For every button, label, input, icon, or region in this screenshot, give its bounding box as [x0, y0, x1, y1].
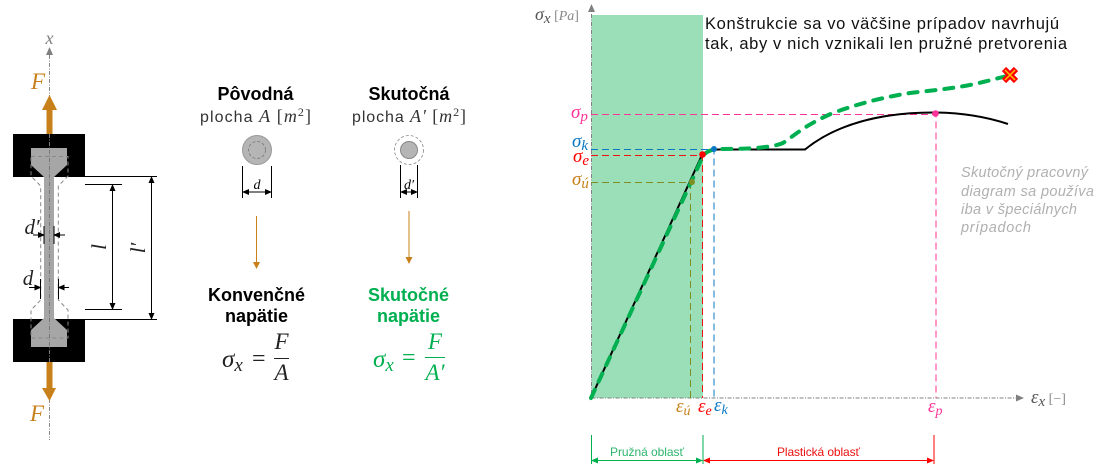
epsilon labels [676, 395, 942, 419]
formula [373, 329, 446, 385]
points [689, 110, 939, 185]
deformed outline [31, 156, 68, 338]
note grey: diagram sa používa [961, 184, 1094, 200]
dimension d [242, 166, 272, 198]
formula: A [272, 360, 289, 385]
label d: d [23, 266, 34, 290]
dimension d [29, 279, 69, 299]
subheading plocha A': plocha A′ [m [352, 106, 452, 126]
formula: x [384, 355, 394, 376]
epsilon labels: ε [698, 396, 706, 417]
heading Konvenčné napätie: Konvenčné [208, 285, 305, 305]
subheading plocha A': 2 [453, 105, 459, 119]
formula: F [273, 329, 289, 354]
sigma labels: e [582, 153, 589, 169]
sigma labels: ú [581, 176, 589, 192]
fracture marker [1004, 69, 1016, 81]
sigma labels: σ [572, 169, 581, 190]
formula: F [427, 329, 443, 354]
epsilon labels: ε [676, 396, 684, 417]
dimension l' [85, 176, 157, 320]
elastic range [592, 435, 703, 464]
axis x: x [44, 28, 54, 48]
specimen body [31, 148, 67, 347]
label l': l′ [126, 242, 150, 253]
note grey [960, 165, 1094, 236]
heading Skutočné napätie: napätie [377, 306, 440, 326]
plastic range: Plastická oblasť [777, 445, 860, 459]
formula: = [252, 346, 266, 372]
formula [222, 329, 289, 385]
specimen diagram [13, 28, 157, 440]
elastic range: Pružná oblasť [610, 445, 684, 459]
cross-section circle [242, 136, 272, 164]
sigma labels: k [581, 138, 588, 154]
epsilon labels: k [722, 403, 728, 418]
y axis label: σ [535, 4, 544, 24]
formula: x [233, 355, 243, 376]
dimension d: d [254, 178, 262, 193]
dimension d' [400, 165, 418, 198]
arrowheads [588, 4, 1024, 402]
elastic region band [592, 15, 703, 398]
subheading plocha A': ] [460, 106, 466, 126]
sigma labels: σ [573, 146, 582, 167]
sigma labels: σ [571, 102, 580, 123]
epsilon labels: ε [714, 395, 722, 416]
note top [705, 15, 1068, 53]
sigma labels: p [579, 109, 588, 125]
stress-strain chart [535, 4, 1094, 464]
sigma labels [571, 102, 589, 192]
dimension l [85, 184, 122, 310]
dimension d': d′ [404, 178, 415, 193]
arrow down [406, 211, 412, 264]
heading Skutočné napätie: Skutočné [368, 285, 449, 305]
epsilon labels: ú [684, 404, 690, 419]
label F bottom: F [29, 401, 45, 426]
sigma labels: σ [572, 131, 581, 152]
formula: σ [222, 346, 234, 373]
subheading plocha A: 2 [298, 105, 304, 119]
note top: Konštrukcie sa vo väčšine prípadov navrhujú [705, 15, 1059, 33]
formula: A′ [423, 360, 446, 385]
epsilon labels: p [934, 404, 942, 419]
x axis label: ε [1031, 387, 1038, 408]
engineering curve [591, 112, 1008, 398]
axes [592, 14, 1018, 398]
cross-section circle [394, 136, 424, 164]
formula: = [402, 345, 416, 371]
true curve [591, 76, 1007, 398]
bottom grip [13, 319, 85, 362]
arrow down [253, 216, 260, 269]
epsilon labels: e [706, 404, 712, 419]
guides [591, 114, 936, 398]
heading Konvenčné napätie: napätie [225, 306, 288, 326]
label F top: F [30, 69, 46, 94]
epsilon labels: ε [928, 396, 936, 417]
label l: l [87, 244, 111, 250]
top grip [13, 134, 85, 177]
y axis label: [ [551, 9, 559, 24]
note top: tak, aby v nich vznikali len pružné pretvorenia [705, 35, 1068, 53]
heading Skutočná: Skutočná [368, 84, 450, 104]
formula: σ [373, 346, 385, 373]
y axis label: Pa] [559, 9, 579, 24]
force arrow up [42, 95, 57, 134]
note grey: prípadoch [960, 220, 1031, 236]
force arrow down [42, 362, 56, 401]
note grey: Skutočný pracovný [961, 165, 1089, 181]
axis x [44, 28, 54, 440]
label d': d′ [24, 215, 40, 239]
heading Pôvodná: Pôvodná [217, 84, 294, 104]
subheading plocha A: plocha A [m [200, 106, 297, 126]
y axis label: x [543, 11, 551, 27]
subheading plocha A: ] [305, 106, 311, 126]
x axis label: [−] [1045, 392, 1066, 407]
dimension d' [33, 226, 65, 244]
column: true area [352, 84, 466, 385]
x axis label: x [1038, 394, 1046, 410]
note grey: iba v špeciálnych [961, 202, 1077, 218]
column: original area [200, 84, 311, 385]
